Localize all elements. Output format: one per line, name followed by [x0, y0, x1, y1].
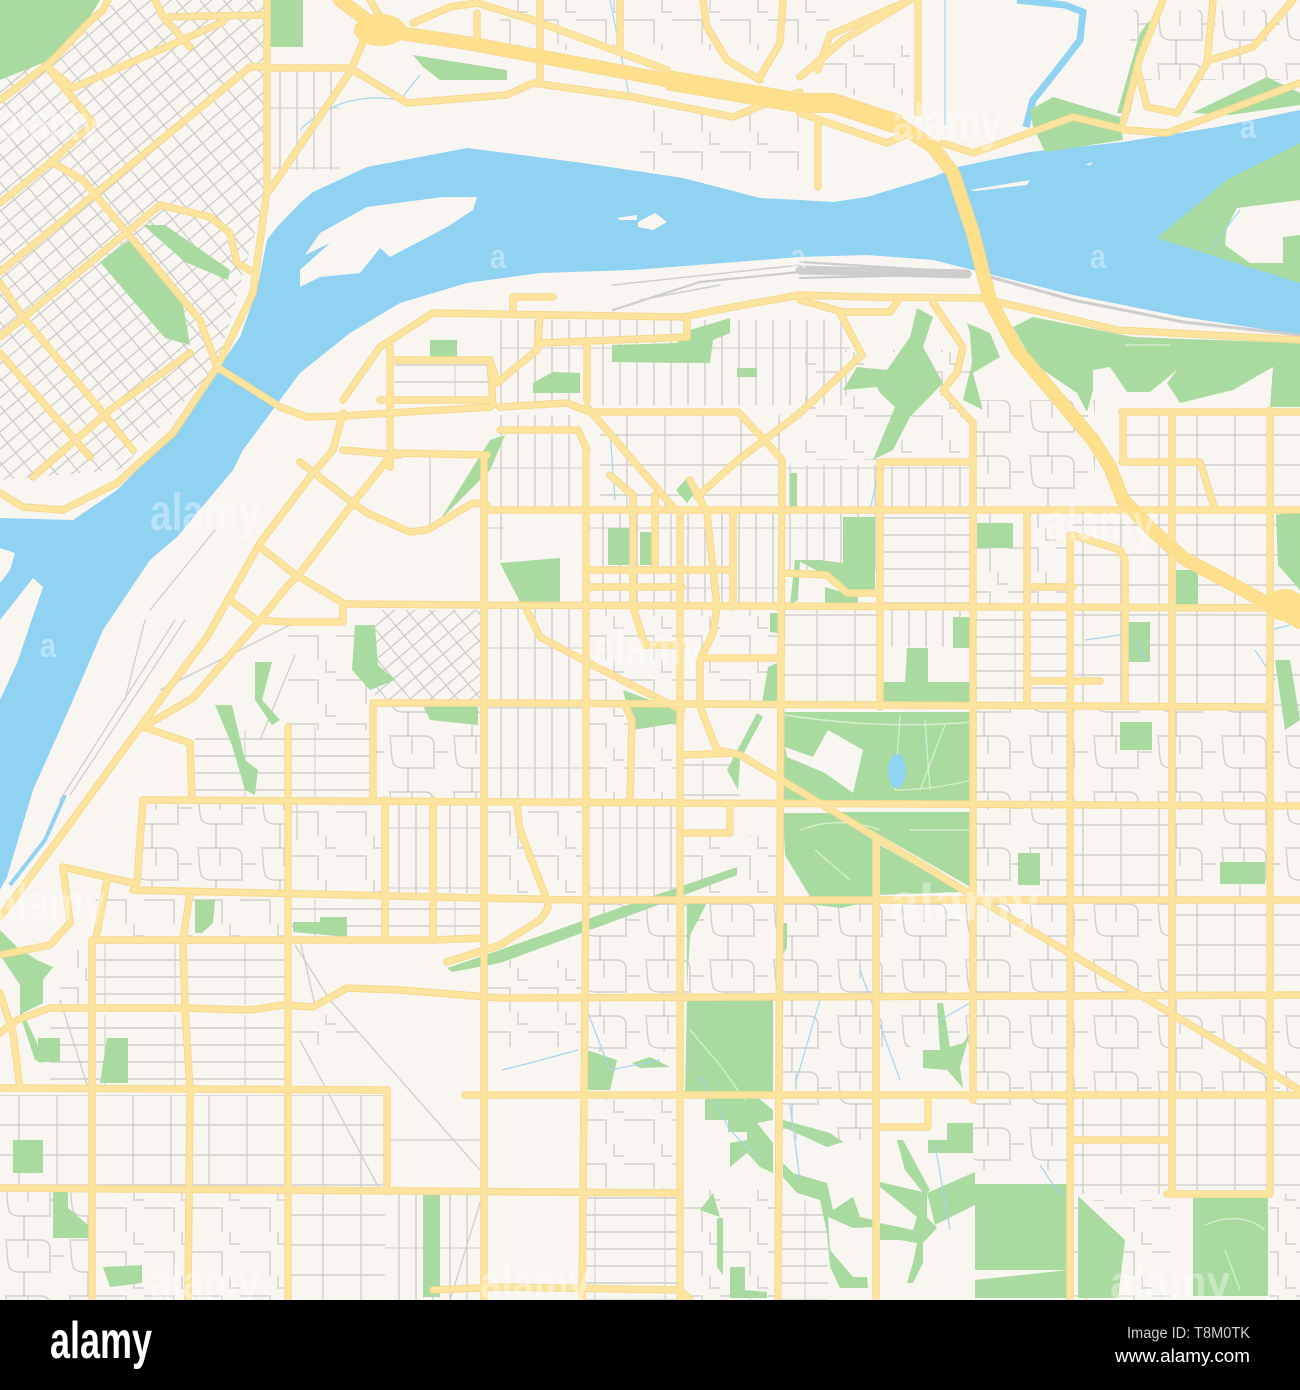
watermarks: alamy [0, 95, 100, 151]
watermarks: a [1090, 238, 1107, 276]
creeks [300, 0, 1290, 1230]
river island [300, 197, 477, 287]
Annacis island [0, 578, 43, 700]
watermarks: alamy [150, 1256, 260, 1308]
park paths and institutional block [690, 200, 1300, 1290]
watermarks: alamy [890, 874, 1040, 932]
small islets [617, 162, 1093, 230]
watermarks: alamy [892, 94, 1002, 152]
watermarks: a [790, 238, 807, 276]
watermarks: alamy [480, 1256, 590, 1308]
footer bar [0, 1300, 1300, 1390]
watermarks: a [1240, 108, 1257, 146]
Pitt River channel [1017, 0, 1083, 127]
image id: Image ID: T8M0TK [1127, 1325, 1250, 1342]
watermarks: alamy [593, 619, 703, 677]
interchanges [354, 14, 1300, 621]
lower island [0, 548, 15, 583]
watermarks: alamy [150, 484, 260, 542]
rail yard [60, 262, 1300, 800]
watermarks: alamy [1110, 1256, 1230, 1308]
river [0, 0, 1300, 890]
footer logo: alamy [50, 1312, 152, 1370]
watermarks: alamy [1045, 494, 1155, 552]
website: www.alamy.com [1114, 1346, 1250, 1366]
watermarks: a [490, 238, 507, 276]
marina channel [10, 795, 65, 885]
watermarks: a [40, 627, 57, 665]
lake [888, 754, 906, 788]
